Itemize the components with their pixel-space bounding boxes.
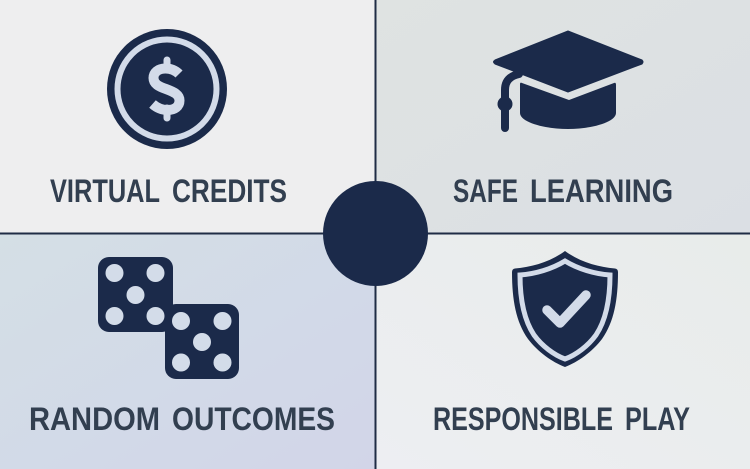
divider: vertical xyxy=(374,0,376,469)
heading: responsible play: RESPONSIBLE xyxy=(433,401,613,437)
heading: virtual credits xyxy=(50,173,287,209)
heading: safe learning: LEARNING xyxy=(530,173,673,209)
heading: random outcomes: OUTCOMES xyxy=(172,401,335,437)
center circle xyxy=(323,181,428,286)
icon: dollar coin xyxy=(107,29,227,149)
panel: safe learning xyxy=(375,0,750,233)
heading: virtual credits: VIRTUAL xyxy=(50,173,160,209)
heading: safe learning xyxy=(453,173,673,209)
divider: horizontal xyxy=(0,232,750,234)
heading: random outcomes xyxy=(29,401,335,437)
heading: responsible play: PLAY xyxy=(625,401,690,437)
panel: virtual credits xyxy=(0,0,375,233)
heading: safe learning: SAFE xyxy=(453,173,518,209)
icon: shield with check xyxy=(512,251,618,367)
heading: virtual credits: CREDITS xyxy=(172,173,287,209)
panel: random outcomes xyxy=(0,233,375,469)
icon: graduation cap xyxy=(494,31,643,129)
icon: dice xyxy=(98,257,239,379)
heading: random outcomes: RANDOM xyxy=(29,401,160,437)
panel: responsible play xyxy=(375,233,750,469)
